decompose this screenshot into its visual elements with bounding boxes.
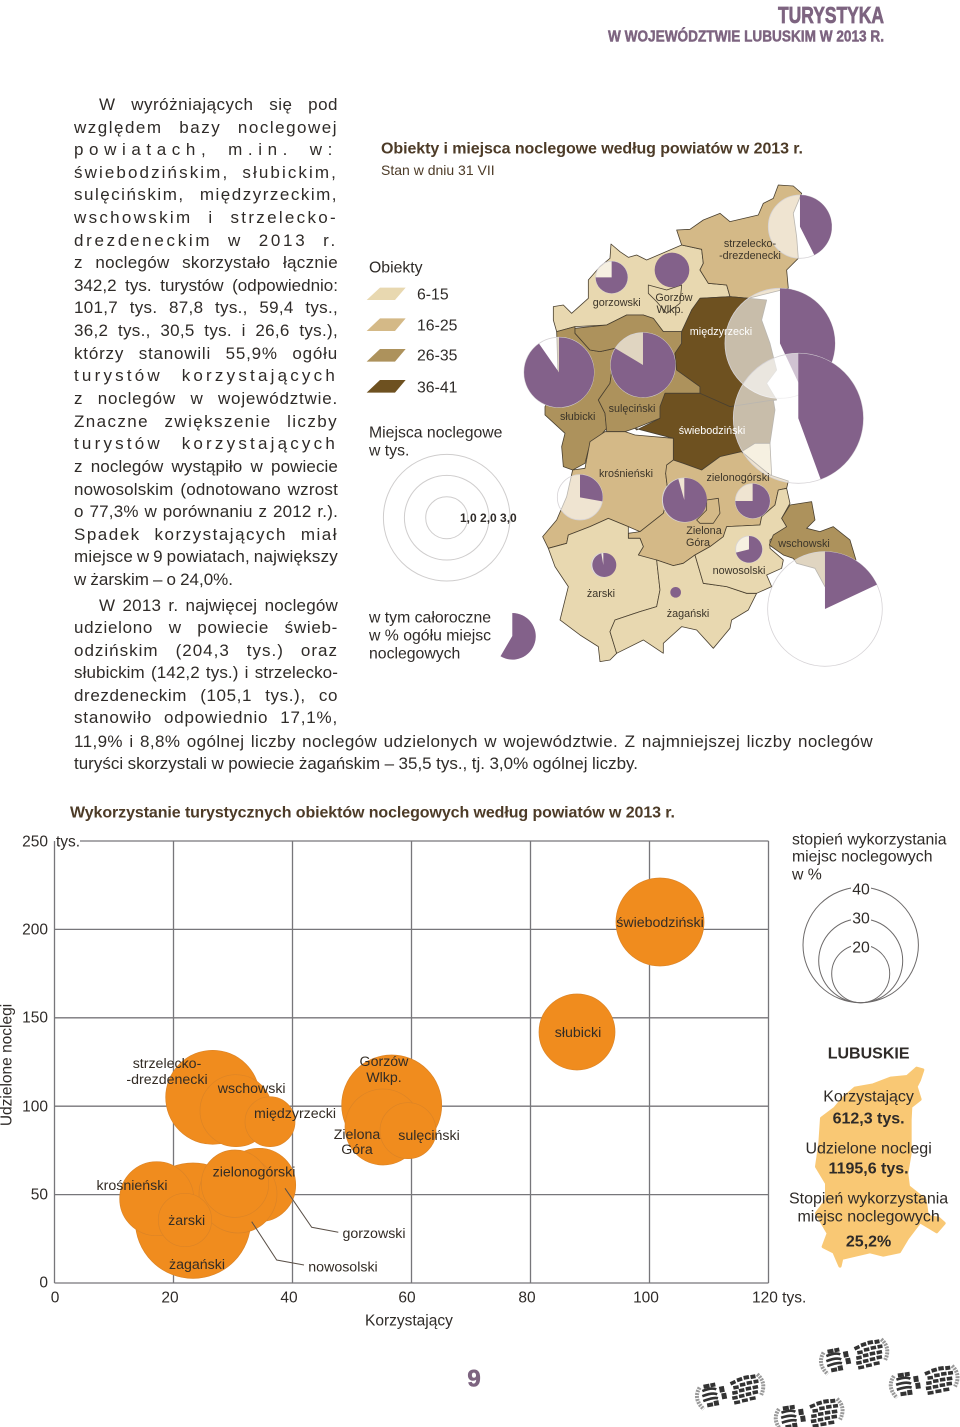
legend: obiekty: Obiekty	[369, 260, 423, 276]
legend: całoroczne	[368, 610, 536, 662]
chart heading: Wykorzystanie turystycznych obiektów noclegowych według powiatów w 2013 r.	[70, 804, 675, 822]
bubble labels: -drezdenecki	[126, 1072, 208, 1088]
axes and grid: 250	[22, 834, 48, 850]
pies north	[524, 195, 863, 483]
map labels: żarski	[587, 588, 615, 600]
axes and grid	[0, 834, 806, 1330]
map of counties	[524, 185, 882, 666]
body text: drezdeneckim w 2013 r.	[74, 231, 338, 250]
body text: powiatach, m.in. w:	[74, 140, 338, 159]
axes and grid: 40	[280, 1290, 298, 1306]
map labels: -drezdenecki	[719, 250, 781, 262]
body text: 11,9% i 8,8% ogólnej liczby noclegów udzielonych w województwie. Z najmniejszej liczby noclegów	[74, 732, 873, 751]
map labels: Zielona	[686, 525, 722, 537]
legend: obiekty: 36-41	[417, 380, 458, 396]
page number: 9	[467, 1366, 481, 1392]
body text: z noclegów skorzystało łącznie	[74, 253, 338, 272]
body text: turyści skorzystali w powiecie żagańskim – 35,5 tys., tj. 3,0% ogólnej liczby.	[74, 754, 638, 773]
axes and grid: 150	[22, 1010, 48, 1026]
body text: Znaczne zwiększenie liczby	[74, 412, 338, 431]
panel: lubuskie summary: 612,3 tys.	[833, 1110, 905, 1128]
body text: o 77,3% w porównaniu z 2012 r.).	[74, 502, 338, 521]
map labels: Gorzów	[655, 292, 693, 304]
panel: lubuskie summary	[789, 1046, 948, 1266]
map labels: gorzowski	[593, 297, 641, 309]
legend: obiekty: 26-35	[417, 348, 458, 364]
body text: nowosolskim (odnotowano wzrost	[74, 480, 338, 499]
panel: lubuskie summary: 25,2%	[846, 1234, 891, 1250]
axes and grid: 60	[398, 1290, 416, 1306]
leader lines	[252, 1188, 338, 1265]
legend: stopień wykorzystania: stopień wykorzystania	[792, 832, 947, 848]
map labels: słubicki	[560, 411, 595, 423]
body text: 101,7 tys. 87,8 tys., 59,4 tys.,	[74, 298, 338, 317]
body text: odzińskim (204,3 tys.) oraz	[74, 641, 338, 660]
bubble labels: wschowski	[217, 1081, 286, 1097]
legend: stopień wykorzystania	[791, 832, 947, 1003]
bubble labels: Zielona	[334, 1127, 380, 1143]
bubble chart	[0, 834, 806, 1330]
counties north	[545, 185, 802, 470]
legend: stopień wykorzystania: miejsc noclegowych	[792, 848, 932, 866]
icon: footprints	[695, 1338, 960, 1427]
body text: świebodzińskim, słubickim,	[74, 163, 338, 182]
bubble labels: żarski	[168, 1213, 205, 1229]
axes and grid: 100	[22, 1098, 48, 1116]
body text: turystów korzystających	[74, 434, 338, 453]
map labels: nowosolski	[713, 565, 765, 577]
axes and grid: 0	[39, 1274, 48, 1292]
legend: stopień wykorzystania: 20	[852, 940, 870, 956]
body text: 36,2 tys., 30,5 tys. i 26,6 tys.),	[74, 321, 338, 340]
axes and grid: 80	[518, 1290, 536, 1306]
map labels: sulęciński	[609, 403, 655, 415]
legend: obiekty: 16-25	[417, 318, 458, 334]
bubble labels: międzyrzecki	[254, 1106, 336, 1122]
legend: miejsca noclegowe: 1,0 2,0 3,0	[460, 511, 517, 525]
legend: stopień wykorzystania: 30	[852, 910, 870, 928]
legend: miejsca noclegowe	[368, 424, 517, 581]
axes and grid: 0	[51, 1290, 60, 1306]
body text: z noclegów w województwie.	[74, 389, 338, 408]
counties south	[543, 432, 856, 662]
body text: stanowiło odpowiednio 17,1%,	[74, 708, 338, 727]
bubble labels: zielonogórski	[213, 1165, 295, 1181]
voivodeship shape	[817, 1068, 944, 1266]
map labels: międzyrzecki	[690, 326, 752, 338]
bubble labels: żagański	[169, 1257, 225, 1273]
body text: W wyróżniających się pod	[99, 95, 338, 114]
body text	[74, 95, 873, 773]
legend: obiekty	[367, 260, 458, 396]
body text: Spadek korzystających miał	[74, 525, 338, 544]
body text: sulęcińskim, międzyrzeckim,	[74, 185, 338, 204]
body text: W 2013 r. najwięcej noclegów	[99, 596, 338, 615]
body text: z noclegów wystąpiło w powiecie	[74, 457, 338, 476]
legend: całoroczne: w % ogółu miejsc	[368, 628, 491, 644]
panel: lubuskie summary: Korzystający	[823, 1088, 914, 1106]
header title: W WOJEWÓDZTWIE LUBUSKIM W 2013 R.	[608, 26, 884, 46]
map labels: krośnieński	[599, 468, 653, 480]
map labels: zielonogórski	[706, 472, 770, 484]
legend: całoroczne: w tym całoroczne	[368, 610, 491, 626]
panel: lubuskie summary: Udzielone noclegi	[805, 1140, 932, 1158]
axes and grid: Korzystający	[365, 1312, 453, 1330]
legend: stopień wykorzystania: 40	[852, 882, 870, 898]
bubble labels: Góra	[341, 1142, 373, 1158]
body text: turystów korzystających	[74, 366, 338, 385]
body text: miejsce w 9 powiatach, największy	[74, 547, 338, 566]
body text: względem bazy noclegowej	[74, 118, 338, 137]
bubble labels: strzelecko-	[133, 1056, 202, 1072]
panel: lubuskie summary: 1195,6 tys.	[829, 1160, 909, 1178]
header title: TURYSTYKA	[778, 2, 884, 28]
bubble labels: gorzowski	[342, 1226, 406, 1242]
axes and grid: 20	[161, 1290, 179, 1306]
bubble labels: krośnieński	[97, 1178, 167, 1194]
map labels: wschowski	[777, 538, 830, 550]
body text: wschowskim i strzelecko-	[74, 208, 338, 227]
bubble labels: Gorzów	[360, 1054, 409, 1070]
body text: 342,2 tys. turystów (odpowiednio:	[74, 276, 338, 295]
map labels: świebodziński	[679, 425, 745, 437]
header title	[608, 2, 884, 46]
axes and grid: 120 tys.	[752, 1290, 806, 1306]
map labels: Góra	[686, 537, 710, 549]
pies south	[557, 475, 882, 666]
legend: miejsca noclegowe: Miejsca noclegowe	[369, 424, 503, 442]
axes and grid: 100	[633, 1290, 659, 1306]
legend: obiekty: 6-15	[417, 286, 449, 304]
panel: lubuskie summary: miejsc noclegowych	[797, 1208, 940, 1226]
legend: miejsca noclegowe: w tys.	[368, 442, 409, 460]
axes and grid: 200	[22, 922, 48, 938]
map heading: Obiekty i miejsca noclegowe według powiatów w 2013 r.	[381, 140, 803, 158]
panel: lubuskie summary: LUBUSKIE	[828, 1046, 910, 1062]
body text: udzielono w powiecie świeb-	[74, 618, 338, 637]
axes and grid: 50	[31, 1186, 48, 1204]
map labels: Wlkp.	[656, 304, 684, 316]
bubble labels: świebodziński	[616, 915, 704, 931]
legend: całoroczne: noclegowych	[369, 646, 460, 662]
map heading: Stan w dniu 31 VII	[381, 162, 495, 178]
body text: słubickim (142,2 tys.) i strzelecko-	[74, 663, 338, 682]
map labels: żagański	[667, 608, 709, 620]
bubble labels	[97, 915, 704, 1276]
bubble labels: nowosolski	[308, 1260, 378, 1276]
body text: w żarskim – o 24,0%.	[74, 570, 233, 589]
map labels	[560, 238, 830, 620]
axes and grid: tys.	[56, 834, 80, 850]
bubble labels: sulęciński	[398, 1128, 460, 1144]
map labels: strzelecko-	[724, 238, 777, 250]
map heading	[381, 140, 803, 178]
legend: stopień wykorzystania: w %	[791, 866, 822, 884]
bubbles	[120, 878, 704, 1278]
bubble labels: słubicki	[555, 1025, 601, 1041]
panel: lubuskie summary: Stopień wykorzystania	[789, 1190, 948, 1208]
body text: którzy stanowili 55,9% ogółu	[74, 344, 338, 363]
bubble labels: Wlkp.	[366, 1070, 402, 1086]
body text: drezdeneckim (105,1 tys.), co	[74, 686, 338, 705]
